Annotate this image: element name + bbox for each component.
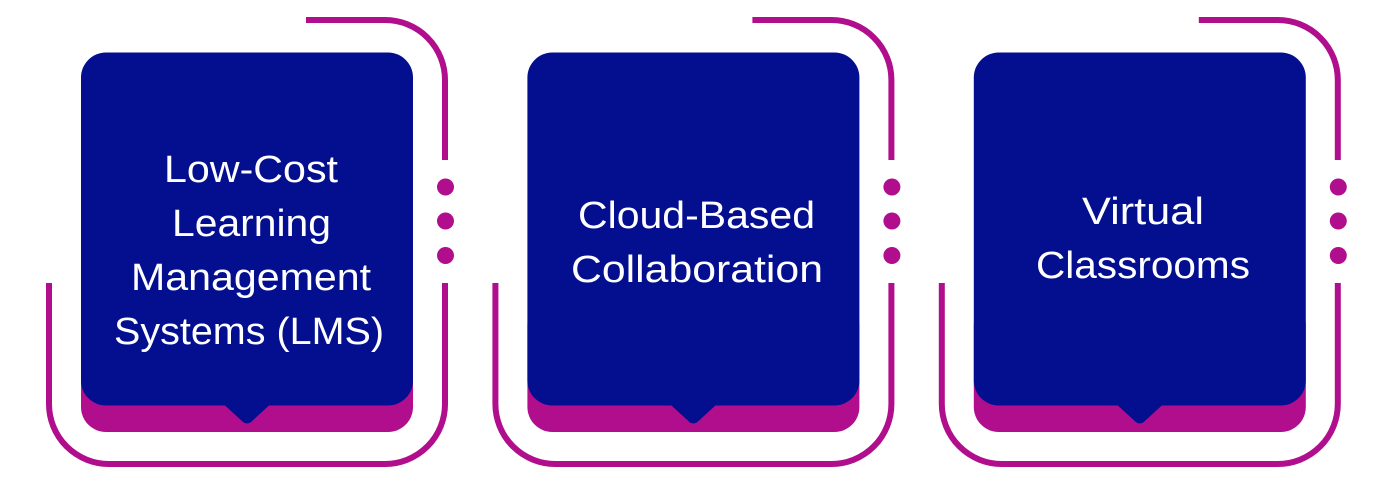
card base: [81, 300, 413, 432]
card: [81, 52, 413, 424]
card text: [571, 195, 823, 291]
panel: Virtual Classrooms: [942, 20, 1347, 464]
card text: Low-Cost: [164, 149, 338, 191]
frame outline: [495, 20, 891, 464]
panel: Cloud-Based Collaboration: [495, 20, 900, 464]
card base: [527, 300, 859, 432]
card text: Learning: [172, 203, 331, 245]
card text: Collaboration: [571, 249, 823, 291]
card text: Cloud-Based: [578, 195, 815, 237]
card text: Virtual: [1082, 191, 1204, 233]
frame outline: [49, 20, 445, 464]
card text: Systems (LMS): [114, 311, 384, 353]
panel: Low-Cost Learning Management Systems: [49, 20, 454, 464]
card text: [1036, 191, 1250, 287]
card: [527, 52, 859, 424]
dots: [437, 178, 454, 264]
card text: [114, 149, 384, 353]
dots: [883, 178, 900, 264]
dots: [1330, 178, 1347, 264]
card text: Management: [131, 257, 371, 299]
frame outline: [942, 20, 1338, 464]
card: [974, 52, 1306, 424]
card base: [974, 300, 1306, 432]
card text: Classrooms: [1036, 245, 1250, 287]
